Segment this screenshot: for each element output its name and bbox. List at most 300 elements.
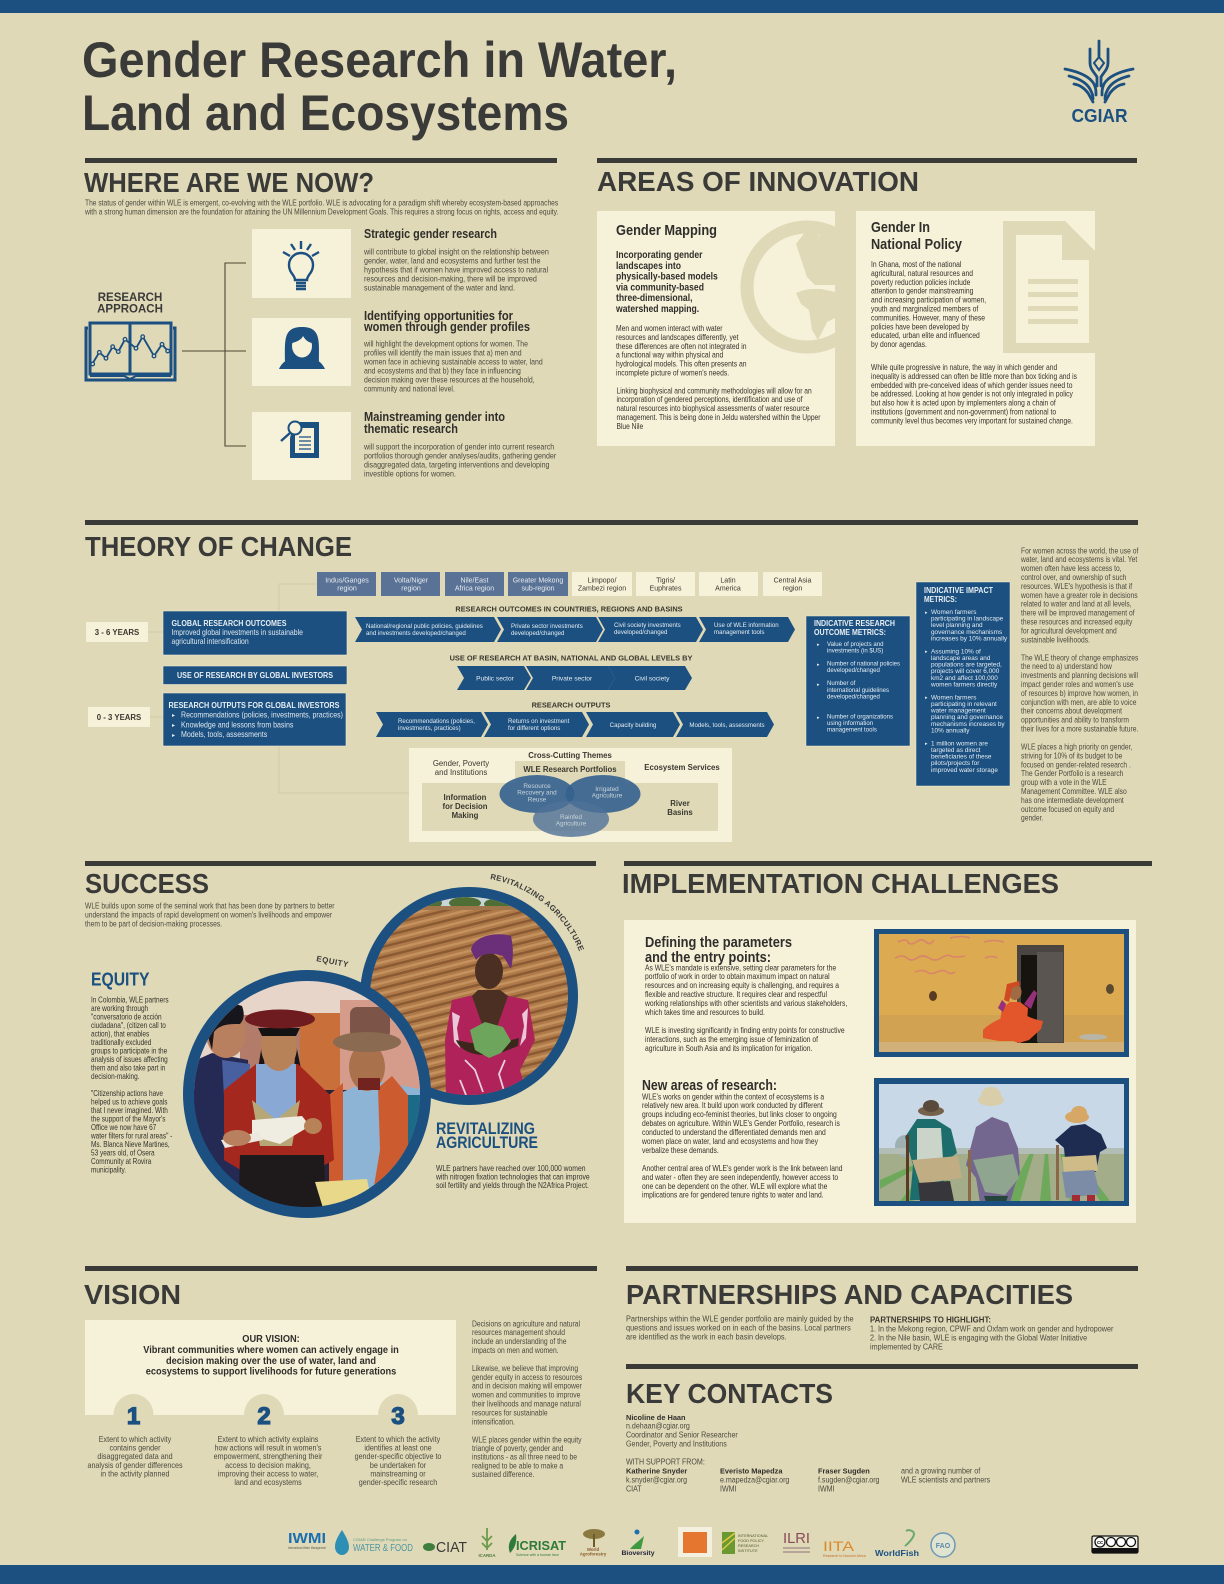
- text: defining the parameters: agriculture in South Asia and its implication for irrigation.: [645, 1043, 812, 1053]
- text: equity: that I never imagined. With: [91, 1106, 168, 1115]
- box: indicative research outcome metrics: investments (in $US): [827, 647, 883, 655]
- criteria 1: contains gender: [109, 1443, 161, 1453]
- criteria 3: identifies at least one: [364, 1443, 432, 1453]
- text: strategic gender research: resources and decision-making, there will be improved: [364, 274, 537, 283]
- text: theory of change narrative: for agricultural development and: [1021, 626, 1117, 636]
- intro text: WLE builds upon some of the seminal work that has been done by partners to better: [85, 901, 335, 910]
- chevron row: research outcomes: and investments developed/changed: [366, 630, 466, 637]
- box: indicative research outcome metrics: management tools: [827, 726, 877, 734]
- text: gender in national policy: institutions (government and non-government) from national to: [871, 407, 1056, 417]
- logo: IITA: IITA: [823, 1538, 855, 1554]
- text: mainstreaming gender: portfolios thorough gender analyses/audits, gathering gender: [364, 451, 557, 460]
- cross-cutting themes diagram: Cross-Cutting Themes: [528, 751, 612, 760]
- badge: creative commons: [1092, 1536, 1138, 1553]
- top band: [0, 0, 1224, 13]
- text: revitalizing agriculture: with nitrogen fixation technologies that can improve: [435, 1172, 590, 1182]
- title: [82, 32, 677, 141]
- box: research outputs for global investors: ▸: [172, 713, 175, 719]
- criteria 3: gender-specific research: [359, 1478, 437, 1487]
- box: research outputs for global investors: Models, tools, assessments: [181, 730, 267, 739]
- intro text: understand the impacts of rapid development on women's livelihoods and empower: [85, 910, 333, 919]
- contact: Fraser Sugden: f.sugden@cgiar.org: [818, 1475, 879, 1485]
- box: research outputs for global investors: [163, 693, 346, 746]
- panel: vision: [84, 1266, 597, 1487]
- text: strategic gender research: hypothesis that if women have improved access to natural: [364, 265, 548, 274]
- text: vision narrative: Likewise, we believe that improving: [472, 1363, 578, 1373]
- box: indicative research outcome metrics: Number of: [827, 680, 856, 687]
- text: theory of change narrative: impact gender roles and women's use: [1021, 679, 1134, 689]
- logo: ICARDA: ICARDA: [478, 1553, 496, 1558]
- text: mainstreaming gender: disaggregated data, targeting interventions and developing: [364, 460, 550, 469]
- text: partnerships intro: questions and issues worked on in each of the basins. Local partners: [626, 1323, 851, 1332]
- box: global research outcomes: [163, 611, 347, 655]
- text: equity: decision-making.: [91, 1072, 140, 1081]
- text: equity: Community at Rovira: [91, 1157, 151, 1166]
- text: equity: "conversatorio de acción: [91, 1013, 162, 1021]
- box: indicative research outcome metrics: [806, 616, 910, 746]
- photo: woman seated at doorway: [874, 929, 1129, 1057]
- text: new areas of research: verbalize these demands.: [642, 1146, 719, 1155]
- text: partnerships to highlight: PARTNERSHIPS TO HIGHLIGHT:: [870, 1316, 991, 1324]
- label: curved equity: EQUITY: [316, 954, 350, 969]
- criteria 2: empowerment, strengthening their: [214, 1452, 323, 1461]
- text: gender in national policy: be addressed. Looking at how gender is not only integrated in policy: [871, 389, 1073, 399]
- text: gender mapping: management. This is being done in Jeldu watershed within the Upper: [616, 412, 821, 422]
- region boxes: region: [783, 586, 802, 592]
- box: indicative research outcome metrics: ▸: [817, 662, 820, 668]
- heading: areas of innovation: AREAS OF INNOVATION: [597, 166, 919, 197]
- text: equity: analysis of issues affecting: [91, 1055, 168, 1064]
- cross-cutting themes diagram: Resource: [523, 783, 551, 790]
- logo: ICRISAT: Science with a human face: [516, 1553, 559, 1557]
- criteria 2: 2: [257, 1403, 271, 1430]
- text: equity: groups to participate in the: [91, 1047, 167, 1055]
- text: vision narrative: intensification.: [472, 1417, 515, 1426]
- logo: CIAT: CIAT: [436, 1539, 467, 1556]
- text: new areas of research: [641, 1078, 843, 1200]
- box: indicative impact metrics: METRICS:: [924, 594, 957, 604]
- chevron row: research outputs: Returns on investment: [508, 718, 569, 725]
- text: new areas of research: and water - often they are seen independently, however access to: [642, 1172, 838, 1182]
- label: curved revitalizing agriculture: REVITALIZING AGRICULTURE: [490, 874, 584, 952]
- chevron row: research outcomes: Private sector investments: [511, 623, 583, 630]
- chevron row: research outcomes: National/regional public policies, guidelines: [366, 623, 483, 630]
- item: strategic gender research: [252, 227, 549, 298]
- timeline labels: [86, 622, 150, 727]
- text: new areas of research: women place on water, land and ecosystems and how they: [641, 1137, 818, 1146]
- region boxes: region: [401, 586, 421, 592]
- criteria 1: in the activity planned: [101, 1469, 169, 1478]
- criteria 3: be undertaken for: [370, 1461, 427, 1470]
- chevron row: use of research: USE OF RESEARCH AT BASIN, NATIONAL AND GLOBAL LEVELS BY: [450, 654, 692, 662]
- region boxes: Indus/Ganges: [325, 578, 369, 584]
- text: gender in national policy: inequality is addressed can often be little more than box ticking and is: [871, 371, 1077, 381]
- region boxes: Central Asia: [774, 578, 811, 584]
- cross-cutting themes diagram: WLE Research Portfolios: [523, 765, 617, 774]
- text: gender profiles: [363, 309, 543, 393]
- text: theory of change narrative: investments and planning decisions will: [1021, 671, 1138, 680]
- text: gender mapping: hydrological models. This often presents an: [616, 359, 747, 369]
- text: equity: the support of the Mayor's: [91, 1115, 166, 1123]
- logo: IFPRI: RESEARCH: [738, 1544, 759, 1548]
- right farmer: [1055, 1124, 1107, 1172]
- cross-cutting themes diagram: Recovery and: [517, 790, 557, 797]
- text: defining the parameters: interactions, such as the emerging issue of feminization of: [645, 1034, 819, 1044]
- criteria 2: Extent to which activity explains: [218, 1435, 318, 1444]
- logo: Bioversity: Bioversity: [622, 1550, 655, 1557]
- text: strategic gender research: gender, water, land and ecosystems and further test the: [364, 256, 540, 265]
- text: defining the parameters: which takes time and resources to build.: [644, 1008, 765, 1017]
- timeline labels: 0 - 3 YEARS: [97, 713, 141, 722]
- heading: vision: VISION: [84, 1279, 181, 1310]
- our vision card: ecosystems to support livelihoods for future generations: [146, 1366, 397, 1378]
- text: mainstreaming gender: Mainstreaming gender into: [364, 410, 505, 424]
- badge: creative commons: cc: [1097, 1540, 1103, 1546]
- chevron row: research outcomes: management tools: [714, 629, 764, 636]
- cross-cutting themes diagram: Making: [452, 811, 479, 820]
- text: mainstreaming gender: [363, 410, 557, 478]
- photo circle: revitalizing agriculture: [360, 874, 584, 1105]
- text: vision narrative: sustained difference.: [472, 1470, 534, 1479]
- contact: Nicoline de Haan: Coordinator and Senior Researcher: [626, 1430, 738, 1440]
- text: gender mapping: resources and landscapes differently, yet: [616, 332, 738, 342]
- text: gender mapping: Men and women interact with water: [616, 324, 723, 333]
- contact: Fraser Sugden: Fraser Sugden: [818, 1466, 870, 1476]
- text: revitalizing agriculture: WLE partners have reached over 100,000 women: [436, 1164, 585, 1173]
- man: [194, 1053, 248, 1184]
- bracket connector: [182, 263, 246, 446]
- text: partnerships to highlight: implemented by CARE: [870, 1342, 943, 1351]
- left farmer: [905, 1119, 957, 1200]
- photo: three women farmers: [874, 1078, 1129, 1206]
- text: new areas of research: WLE's works on gender within the context of ecosystems is a: [642, 1092, 824, 1101]
- box: global research outcomes: Improved global investments in sustainable: [172, 627, 303, 637]
- chevron row: research outputs: investments, practices): [398, 725, 461, 732]
- text: partnerships to highlight: 2. In the Nile basin, WLE is engaging with the Global Water Initiative: [870, 1333, 1087, 1342]
- box: indicative research outcome metrics: international guidelines: [827, 687, 889, 694]
- region boxes: Latin: [720, 578, 736, 584]
- text: partnerships to highlight: [870, 1316, 1114, 1351]
- cross-cutting themes diagram: Irrigated: [595, 786, 619, 793]
- cross-cutting themes diagram: Information: [444, 793, 486, 802]
- box: global research outcomes: GLOBAL RESEARCH OUTCOMES: [172, 619, 287, 628]
- intro text: them to be part of decision-making processes.: [85, 919, 222, 928]
- box: indicative impact metrics: populations are targeted,: [931, 662, 1002, 669]
- box: indicative impact metrics: governance mechanisms: [931, 629, 1003, 636]
- item: mainstreaming gender: [252, 410, 557, 480]
- region boxes: America: [715, 586, 741, 592]
- text: gender mapping: [615, 222, 821, 431]
- box: indicative impact metrics: improved water storage: [931, 767, 998, 774]
- text: new areas of research: conducted to understand the differentiated demands men and: [642, 1128, 826, 1137]
- text: theory of change narrative: women often have less access to,: [1020, 564, 1122, 573]
- box: indicative impact metrics: ▸: [925, 741, 928, 747]
- logo: icipe: [678, 1527, 712, 1557]
- logo: FAO: [931, 1533, 955, 1557]
- heading: success: SUCCESS: [85, 868, 209, 899]
- text: gender in national policy: [871, 219, 1077, 426]
- text: new areas of research: New areas of research:: [642, 1078, 777, 1094]
- logo: Bioversity: [622, 1530, 655, 1557]
- text: gender in national policy: In Ghana, most of the national: [871, 260, 961, 269]
- text: new areas of research: one can be dependent on the other. WLE will explore what the: [642, 1181, 827, 1191]
- logo: WorldFish: [875, 1530, 919, 1558]
- item: gender profiles: [252, 309, 543, 393]
- criteria 1: analysis of gender differences: [87, 1461, 183, 1470]
- contact: Fraser Sugden: [818, 1466, 879, 1494]
- text: vision narrative: women and communities to improve: [471, 1390, 580, 1400]
- text: theory of change narrative: control over, and ownership of such: [1021, 572, 1126, 582]
- box: indicative impact metrics: ▸: [925, 610, 928, 616]
- card: gender in national policy: [856, 211, 1095, 446]
- box: indicative research outcome metrics: developed/changed: [827, 667, 880, 674]
- chevron row: research outcomes: developed/changed: [511, 630, 565, 637]
- logo: IITA: [823, 1538, 866, 1558]
- region boxes: Greater Mekong: [513, 578, 563, 584]
- criteria 1: Extent to which activity: [99, 1435, 171, 1444]
- box: indicative impact metrics: Women farmers: [931, 694, 977, 701]
- chevron row: research outputs: RESEARCH OUTPUTS: [532, 700, 610, 710]
- text: equity: traditionally excluded: [91, 1038, 151, 1047]
- chevron row: research outputs: [376, 700, 774, 737]
- logo: IFPRI: INSTITUTE: [738, 1549, 758, 1553]
- text: theory of change narrative: their lives for a more sustainable future.: [1021, 724, 1138, 734]
- box: indicative impact metrics: INDICATIVE IMPACT: [924, 585, 994, 595]
- box: research outputs for global investors: ▸: [172, 723, 175, 729]
- logo: world agroforestry centre: [580, 1529, 607, 1556]
- logo: IITA: Research to Nourish Africa: [823, 1554, 866, 1558]
- panel: partnerships and capacities: [626, 1266, 1138, 1351]
- intro text: with a strong human dimension are the foundation for attaining the UN Millennium Development Goals. This requires a strong focus on rights, access and equity.: [84, 207, 558, 217]
- text: gender profiles: women through gender profiles: [363, 320, 530, 334]
- box: indicative impact metrics: beneficiaries of these: [931, 754, 992, 761]
- intro text: The status of gender within WLE is emergent, co-evolving with the WLE portfolio. WLE is advocating for a paradigm shift whereby ecosystem-based approaches: [85, 198, 558, 208]
- logo: world agroforestry centre: World: [587, 1547, 599, 1552]
- box: indicative impact metrics: planning and governance: [931, 714, 1003, 721]
- criteria 1: disaggregated data and: [97, 1452, 173, 1461]
- text: gender in national policy: educated, urban elite and influenced: [871, 331, 980, 340]
- right woman: [335, 1082, 420, 1204]
- text: gender profiles: Identifying opportunities for: [364, 309, 513, 323]
- text: gender profiles: decision making over these resources at the household,: [364, 375, 535, 384]
- icon: woman silhouette: [279, 327, 325, 369]
- text: gender mapping: incorporation of gendered perceptions, identification and use of: [616, 395, 803, 404]
- text: gender in national policy: attention to gender mainstreaming: [871, 286, 973, 296]
- contact: Katherine Snyder: k.snyder@cgiar.org: [626, 1475, 687, 1485]
- criteria 3: gender-specific objective to: [355, 1452, 441, 1461]
- text: theory of change narrative: women have a greater role in decisions: [1020, 590, 1138, 600]
- card: gender mapping: [597, 211, 835, 446]
- text: gender profiles: community and national level.: [364, 384, 455, 393]
- box: use of research by global investors: USE OF RESEARCH BY GLOBAL INVESTORS: [177, 671, 334, 680]
- chevron row: research outcomes: developed/changed: [614, 629, 668, 636]
- box: research outputs for global investors: RESEARCH OUTPUTS FOR GLOBAL INVESTORS: [168, 701, 340, 710]
- text: strategic gender research: [363, 227, 549, 292]
- contact: Everisto Mapedza: Everisto Mapedza: [720, 1466, 783, 1476]
- text: gender in national policy: poverty reduction policies include: [871, 277, 970, 287]
- text: defining the parameters: flexible and reactive structure. It requires clear and respectful: [645, 990, 827, 999]
- text: equity: them and also take part in: [91, 1064, 165, 1072]
- panel: areas of innovation: [597, 158, 1137, 446]
- text: equity: Office we now have 67: [91, 1123, 156, 1132]
- text: defining the parameters: Defining the parameters: [645, 935, 792, 951]
- box: indicative impact metrics: Assuming 10% of: [931, 648, 981, 655]
- criteria 2: improving their access to water,: [218, 1469, 318, 1478]
- text: theory of change narrative: conjunction with men, are able to voice: [1021, 697, 1136, 707]
- text: gender mapping: Gender Mapping: [616, 222, 717, 239]
- region boxes: sub-region: [521, 586, 555, 592]
- title: Gender Research in Water,: [82, 32, 677, 88]
- logo: water and food: WATER & FOOD: [353, 1543, 413, 1554]
- chevron row: research outcomes: Civil society investments: [614, 622, 681, 629]
- text: gender mapping: these differences are often not integrated in: [616, 341, 747, 351]
- criteria 3: [355, 1394, 441, 1487]
- text: equity: In Colombia, WLE partners: [91, 996, 169, 1004]
- panel: where are we now: [84, 158, 559, 480]
- text: gender mapping: Linking biophysical and community methodologies will allow for an: [616, 386, 812, 395]
- cross-cutting themes diagram: Reuse: [528, 796, 547, 803]
- text: gender profiles: women face in achieving sustainable access to water, land: [363, 357, 543, 366]
- text: vision narrative: their livelihoods and manage natural: [472, 1399, 581, 1409]
- region boxes: Nile/East: [460, 578, 489, 584]
- region boxes: region: [337, 586, 357, 592]
- text: gender mapping: natural resources into biophysical assessments of water resource: [616, 404, 809, 413]
- label: with support from: WITH SUPPORT FROM:: [626, 1457, 705, 1467]
- region boxes: Zambezi region: [578, 586, 626, 592]
- text: theory of change narrative: sustainable livelihoods.: [1021, 635, 1090, 644]
- text: new areas of research: debates on agriculture. Within WLE's Gender Portfolio, research is: [642, 1119, 840, 1128]
- logo: FAO: FAO: [936, 1543, 951, 1550]
- research approach label: APPROACH: [97, 304, 163, 316]
- text: vision narrative: WLE places gender within the equity: [472, 1435, 582, 1444]
- our vision card: [85, 1320, 456, 1415]
- box: indicative impact metrics: participating in landscape: [931, 616, 1004, 623]
- contact: Nicoline de Haan: n.dehaan@cgiar.org: [626, 1421, 690, 1431]
- logo: world agroforestry centre: Agroforestry: [580, 1552, 607, 1556]
- chevron row: research outputs: Models, tools, assessments: [689, 722, 765, 729]
- chevron row: research outcomes: Use of WLE information: [714, 622, 779, 629]
- cross-cutting themes diagram: for Decision: [442, 802, 488, 811]
- box: indicative impact metrics: women farmers directly: [930, 681, 998, 688]
- chevron row: research outputs: Capacity building: [610, 722, 657, 729]
- box: research outputs for global investors: Knowledge and lessons from basins: [181, 720, 294, 730]
- criteria 2: access to decision making,: [225, 1461, 311, 1470]
- box: indicative impact metrics: participating in relevant: [931, 701, 997, 708]
- box: indicative research outcome metrics: OUTCOME METRICS:: [814, 627, 886, 637]
- text: strategic gender research: will contribute to global insight on the relationship between: [364, 247, 549, 256]
- our vision card: OUR VISION:: [242, 1334, 300, 1345]
- region boxes: [317, 572, 822, 596]
- research approach label: RESEARCH: [98, 292, 162, 304]
- text: gender mapping: physically-based models: [616, 271, 718, 283]
- contact: Everisto Mapedza: IWMI: [720, 1484, 737, 1494]
- logo: ICRISAT: [509, 1534, 566, 1557]
- text: theory of change narrative: water, land and ecosystems is vital. Yet: [1020, 555, 1137, 564]
- criteria 3: 3: [391, 1403, 405, 1430]
- text: theory of change narrative: related to water and land at all levels,: [1021, 599, 1132, 609]
- box: indicative impact metrics: ▸: [925, 695, 928, 701]
- box: indicative research outcome metrics: ▸: [817, 682, 820, 688]
- box: indicative impact metrics: water management: [930, 708, 986, 715]
- text: gender in national policy: community level thus becomes very important for sustained change.: [871, 416, 1073, 426]
- region boxes: Tigris/: [656, 578, 675, 584]
- text: theory of change narrative: The WLE theory of change emphasizes: [1021, 653, 1139, 662]
- criteria 2: land and ecosystems: [234, 1478, 302, 1487]
- text: new areas of research: Another central area of WLE's gender work is the link between land: [642, 1163, 843, 1173]
- panel: theory of change: [85, 520, 1139, 842]
- contact: Katherine Snyder: [626, 1466, 687, 1494]
- box: indicative impact metrics: mechanisms increases by: [931, 721, 1005, 728]
- chevron row: use of research: Public sector: [476, 676, 515, 682]
- box: global research outcomes: agricultural intensification: [172, 636, 249, 646]
- heading: partnerships and capacities: PARTNERSHIPS AND CAPACITIES: [626, 1279, 1073, 1310]
- text: partnerships intro: Partnerships within the WLE gender portfolio are mainly guided by the: [626, 1314, 854, 1323]
- text: mainstreaming gender: will support the incorporation of gender into current research: [364, 442, 554, 451]
- icon: globe: [740, 220, 835, 354]
- logo: WorldFish: WorldFish: [875, 1548, 919, 1558]
- cross-cutting themes diagram: Gender, Poverty: [433, 759, 489, 768]
- text: partnerships intro: are identified as the work in each basin develops.: [626, 1332, 787, 1341]
- box: indicative research outcome metrics: Value of projects and: [827, 641, 883, 648]
- text: growing number: and a growing number of: [901, 1466, 980, 1476]
- text: gender mapping: three-dimensional,: [616, 292, 693, 304]
- text: new areas of research: implications are for gendered tenure rights to water and land.: [642, 1190, 824, 1200]
- contact: Nicoline de Haan: Nicoline de Haan: [626, 1413, 686, 1422]
- text: growing number: WLE scientists and partners: [901, 1475, 990, 1485]
- chevron row: research outputs: Recommendations (policies,: [398, 718, 475, 725]
- chevron row: research outputs: for different options: [508, 725, 560, 732]
- contact: Katherine Snyder: Katherine Snyder: [626, 1466, 687, 1476]
- text: mainstreaming gender: thematic research: [364, 422, 458, 436]
- heading: where are we now: WHERE ARE WE NOW?: [84, 167, 374, 198]
- logo: water and food: CGIAR Challenge Program on: [353, 1537, 407, 1542]
- text: defining the parameters: resources and on increasing equity is challenging, and requires a: [645, 981, 840, 990]
- box: indicative impact metrics: increases by 10% annually: [931, 635, 1008, 642]
- text: gender in national policy: Gender In: [871, 219, 930, 236]
- text: theory of change narrative: there will be improved management of: [1021, 608, 1135, 618]
- text: new areas of research: groups including eco-feminist theories, but links closer to ongoing: [642, 1110, 837, 1119]
- text: theory of change narrative: opportunities and ability to transform: [1021, 715, 1129, 725]
- cross-cutting themes diagram: Agriculture: [556, 821, 587, 828]
- text: strategic gender research: sustainable management of the water and land.: [364, 283, 515, 292]
- chevron row: use of research: Civil society: [635, 676, 670, 682]
- timeline labels: 3 - 6 YEARS: [95, 628, 139, 637]
- text: vision narrative: resources for sustainable: [472, 1408, 548, 1418]
- text: equity: Ms. Blanca Nieve Martines,: [91, 1140, 170, 1149]
- logo: water and food: [335, 1530, 413, 1555]
- box: indicative research outcome metrics: developed/changed: [827, 693, 880, 700]
- text: vision narrative: and in decision making will empower: [472, 1381, 582, 1391]
- photo circle: equity: [183, 970, 432, 1225]
- text: vision narrative: include an understanding of the: [472, 1337, 567, 1346]
- box: indicative research outcome metrics: ▸: [817, 642, 820, 648]
- text: vision narrative: resources management should: [472, 1328, 565, 1337]
- text: theory of change narrative: resources. WLE's hypothesis is that if: [1021, 581, 1133, 591]
- middle farmer: [966, 1117, 1020, 1203]
- text: theory of change narrative: the need to a) understand how: [1021, 662, 1113, 671]
- center woman: [258, 1048, 300, 1066]
- criteria 3: Extent to which the activity: [356, 1435, 440, 1444]
- chevron row: research outcomes: RESEARCH OUTCOMES IN COUNTRIES, REGIONS AND BASINS: [455, 604, 683, 614]
- text: gender mapping: watershed mapping.: [615, 303, 699, 315]
- region boxes: Africa region: [455, 586, 494, 592]
- text: vision narrative: Decisions on agriculture and natural: [472, 1319, 580, 1328]
- criteria 2: [214, 1394, 323, 1487]
- text: gender mapping: landscapes into: [616, 260, 681, 272]
- text: strategic gender research: Strategic gender research: [364, 227, 497, 241]
- box: research outputs for global investors: ▸: [172, 733, 175, 739]
- bottom band: [0, 1565, 1224, 1584]
